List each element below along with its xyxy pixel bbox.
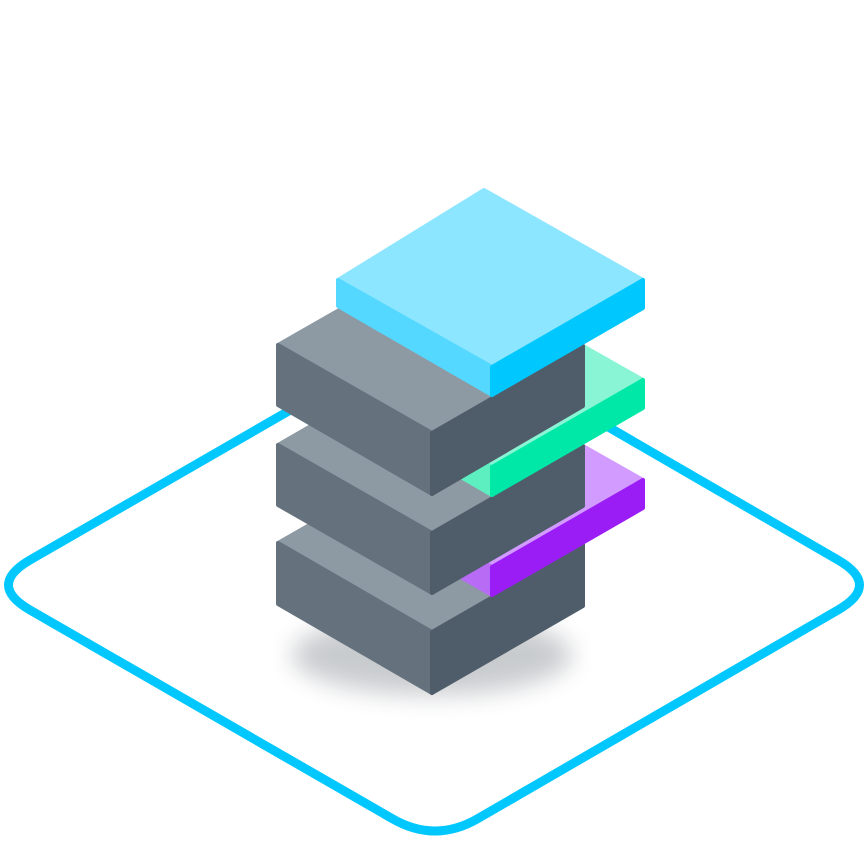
slab: green [338, 290, 643, 495]
block: bottom gray [278, 455, 583, 693]
block: top gray [278, 257, 583, 494]
slab: blue top [338, 190, 643, 395]
block: middle gray [278, 356, 583, 593]
shadow [292, 615, 572, 695]
platform outline [8, 339, 860, 831]
slab: purple [338, 390, 643, 595]
